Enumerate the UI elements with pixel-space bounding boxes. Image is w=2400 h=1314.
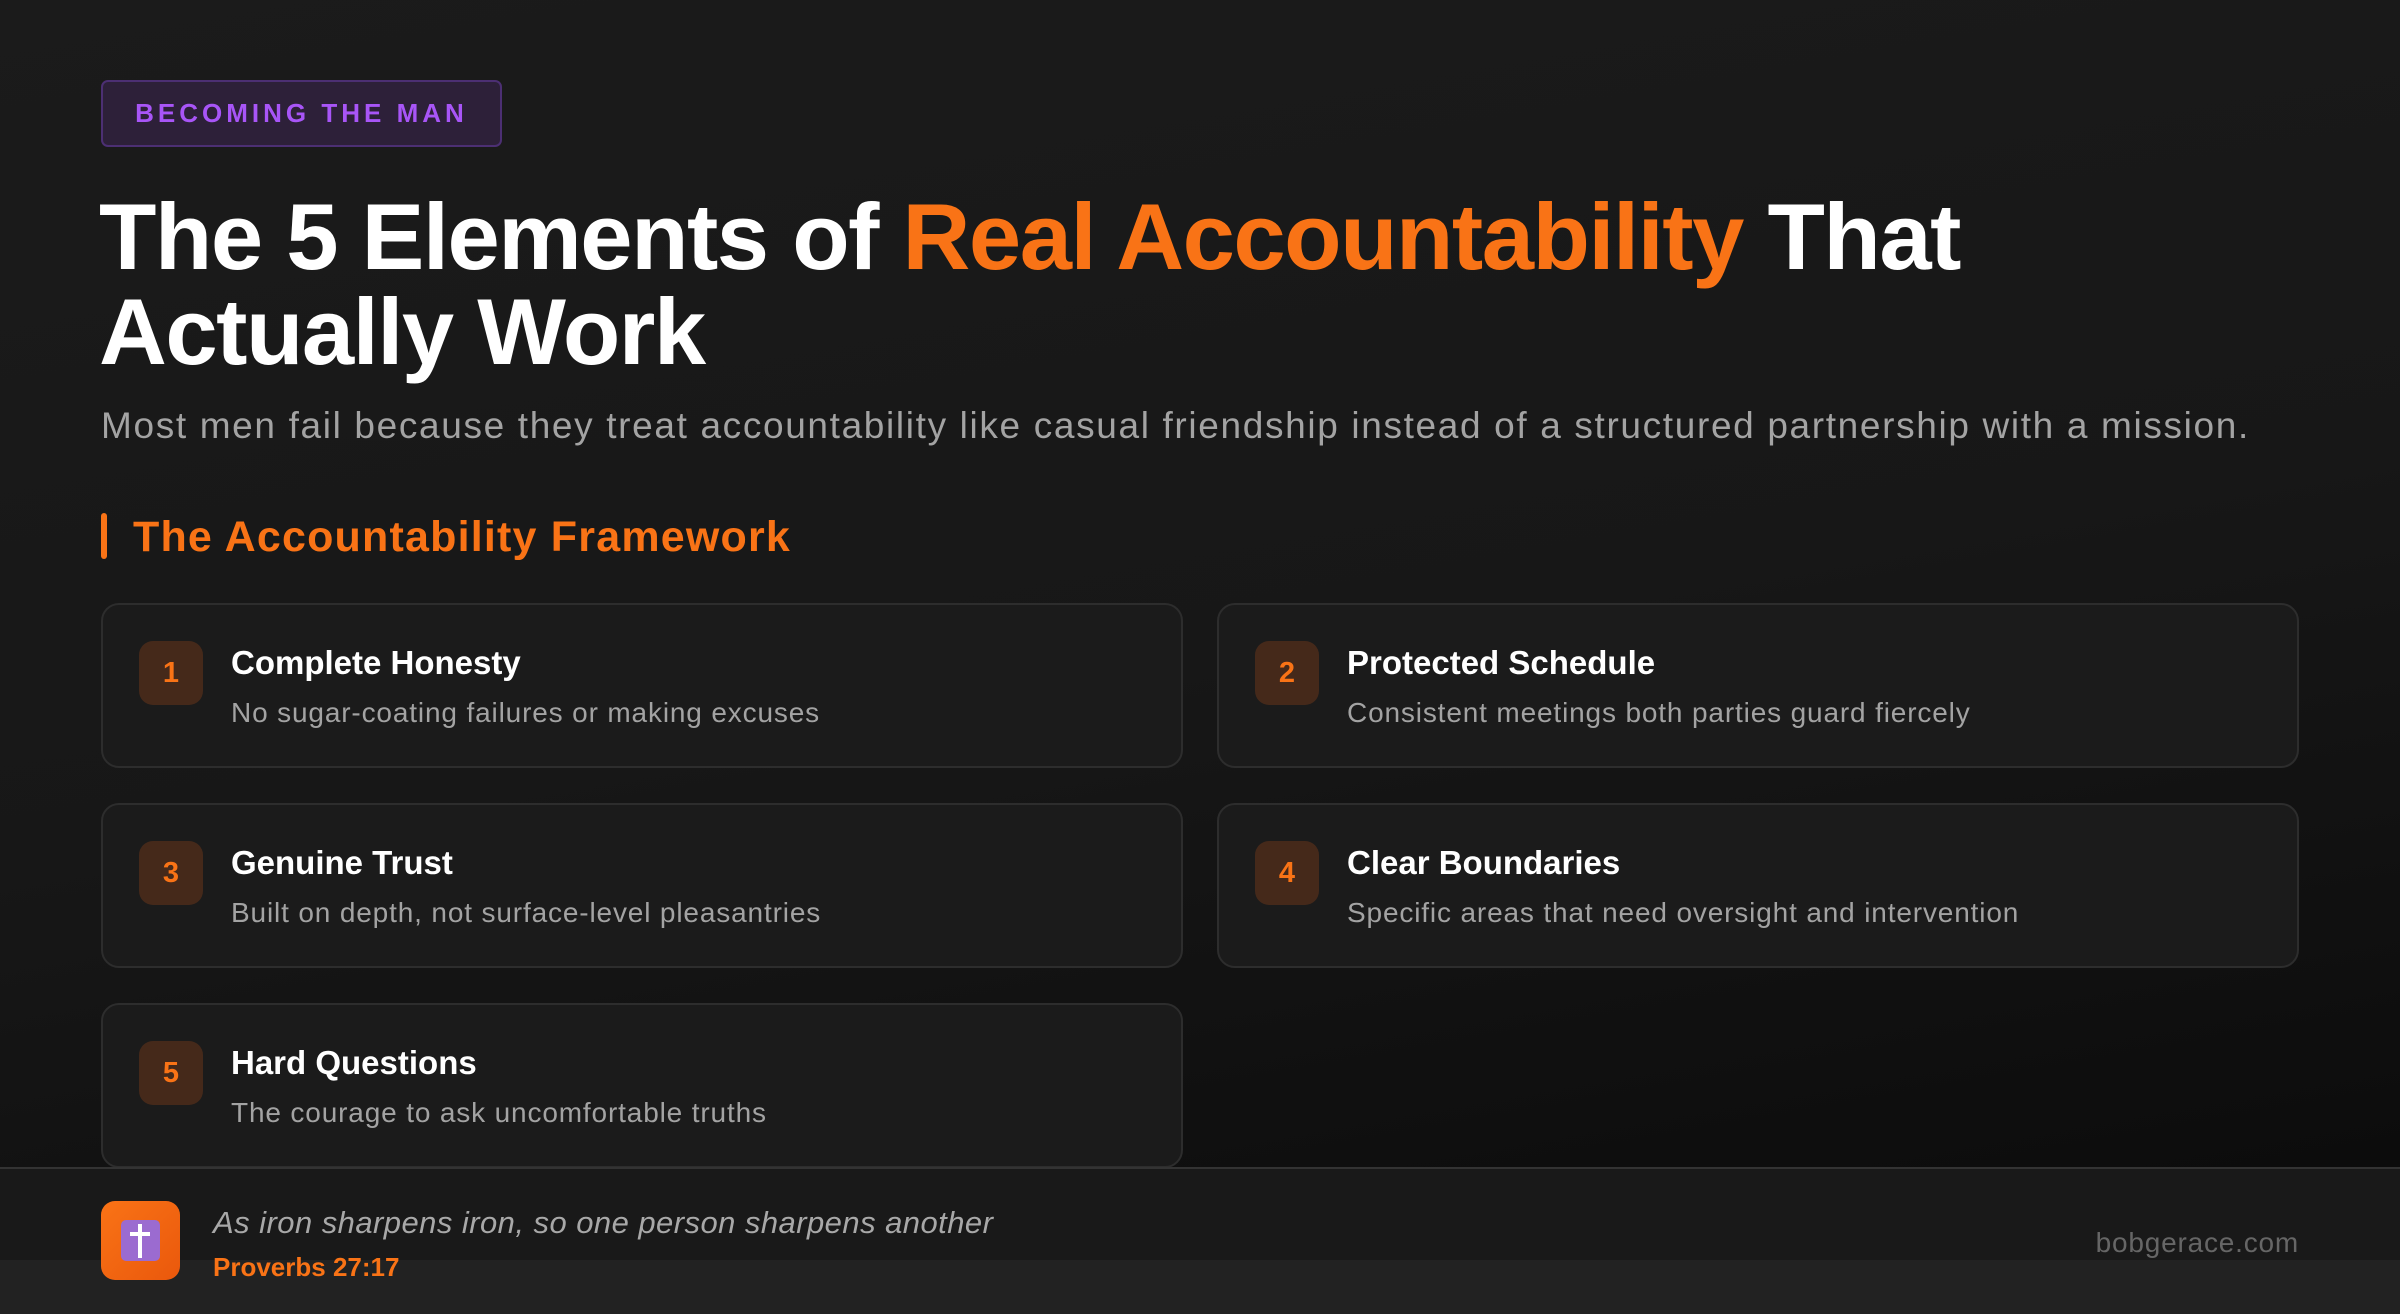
card 1: [101, 603, 1183, 768]
card 5: Hard Questions: [231, 1044, 477, 1081]
card 4: Clear Boundaries: [1347, 844, 1620, 881]
badge: BECOMING THE MAN: [135, 98, 468, 128]
title: Actually Work: [99, 279, 705, 384]
card 5: 5: [163, 1057, 179, 1089]
footer: [0, 1167, 2400, 1260]
card 3: 3: [163, 857, 179, 889]
card 1: 1: [163, 657, 179, 689]
card 1: No sugar-coating failures or making excuses: [231, 697, 820, 728]
card 2: [1217, 603, 2299, 768]
website: bobgerace.com: [2096, 1227, 2299, 1258]
card 1: Complete Honesty: [231, 644, 521, 681]
icon: cross: [101, 1201, 180, 1280]
card 4: 4: [1279, 857, 1295, 889]
card 2: 2: [1279, 657, 1295, 689]
badge: [101, 80, 502, 147]
quote reference: Proverbs 27:17: [213, 1252, 399, 1282]
card 3: [101, 803, 1183, 968]
card 3: Built on depth, not surface-level pleasantries: [231, 897, 821, 928]
quote: As iron sharpens iron, so one person sharpens another: [213, 1205, 993, 1240]
title: [99, 184, 1960, 384]
card 5: The courage to ask uncomfortable truths: [231, 1097, 767, 1128]
title: The 5 Elements of Real Accountability That: [99, 184, 1960, 289]
section heading: The Accountability Framework: [133, 513, 791, 561]
card 4: [1217, 803, 2299, 968]
card 4: Specific areas that need oversight and intervention: [1347, 897, 2019, 928]
card 5: [101, 1003, 1183, 1168]
card 2: Protected Schedule: [1347, 644, 1655, 681]
subtitle: Most men fail because they treat accountability like casual friendship instead of a structured partnership with a mission.: [101, 405, 2250, 446]
card 2: Consistent meetings both parties guard fiercely: [1347, 697, 1971, 728]
card 3: Genuine Trust: [231, 844, 453, 881]
